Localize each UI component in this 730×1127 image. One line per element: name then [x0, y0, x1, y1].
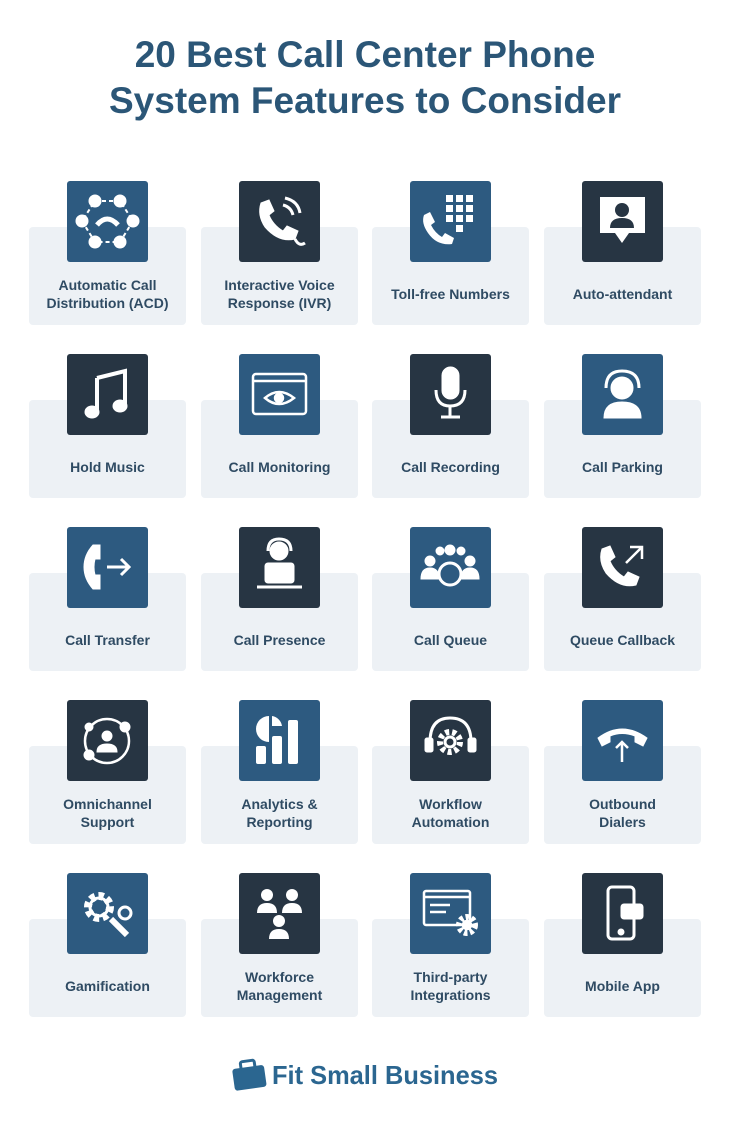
card: Mobile App	[544, 873, 701, 1017]
card: Toll-free Numbers	[372, 181, 529, 325]
card: Analytics & Reporting: Reporting	[246, 814, 313, 830]
card: Outbound Dialers: Dialers	[599, 814, 646, 830]
title	[109, 34, 621, 121]
title: 20 Best Call Center Phone	[135, 34, 595, 75]
card: IVR: Response (IVR)	[228, 294, 331, 310]
card: Call Presence	[201, 527, 358, 671]
card: Third-party Integrations: Integrations	[410, 986, 491, 1002]
card: Outbound Dialers	[544, 700, 701, 844]
card: Call Presence: Call Presence	[234, 632, 325, 648]
card: Call Transfer	[29, 527, 186, 671]
card: IVR	[201, 181, 358, 325]
card: Gamification: Gamification	[65, 978, 150, 994]
card: Third-party Integrations	[372, 873, 529, 1017]
card: Gamification	[29, 873, 186, 1017]
card: Mobile App: Mobile App	[585, 978, 660, 994]
card: Workforce Management: Management	[237, 986, 322, 1002]
card: Automatic Call Distribution	[29, 181, 186, 325]
card: Automatic Call Distribution: Automatic Call	[58, 276, 156, 292]
card: Automatic Call Distribution: Distribution (ACD)	[46, 294, 169, 310]
card: Workforce Management: Workforce	[245, 968, 314, 984]
card: Call Recording	[372, 354, 529, 498]
card: Call Parking: Call Parking	[582, 458, 663, 474]
card: Auto-attendant: Auto-attendant	[573, 286, 672, 302]
card: Analytics & Reporting: Analytics &	[241, 796, 318, 812]
title: System Features to Consider	[109, 80, 621, 121]
card: IVR: Interactive Voice	[224, 276, 335, 292]
card: Call Monitoring	[201, 354, 358, 498]
card: Omnichannel Support: Support	[81, 814, 134, 830]
card: Hold Music	[29, 354, 186, 498]
logo: Fit Small Business: Fit Small Business	[272, 1060, 498, 1090]
card: Auto-attendant	[544, 181, 701, 325]
card: Call Recording: Call Recording	[401, 458, 500, 474]
card: Call Parking	[544, 354, 701, 498]
card: Omnichannel Support	[29, 700, 186, 844]
card: Outbound Dialers: Outbound	[589, 796, 656, 812]
card: Queue Callback: Queue Callback	[570, 632, 675, 648]
card: Workflow Automation: Automation	[412, 814, 489, 830]
card: Call Monitoring: Call Monitoring	[229, 458, 330, 474]
card: Workforce Management	[201, 873, 358, 1017]
card: Analytics & Reporting	[201, 700, 358, 844]
card: Call Transfer: Call Transfer	[65, 632, 150, 648]
card: Omnichannel Support: Omnichannel	[63, 796, 152, 812]
card: Workflow Automation	[372, 700, 529, 844]
card: Workflow Automation: Workflow	[419, 796, 482, 812]
card: Toll-free Numbers: Toll-free Numbers	[391, 286, 510, 302]
card: Call Queue: Call Queue	[414, 632, 487, 648]
card: Queue Callback	[544, 527, 701, 671]
card: Call Queue	[372, 527, 529, 671]
card: Third-party Integrations: Third-party	[414, 968, 487, 984]
card: Hold Music: Hold Music	[70, 458, 145, 474]
